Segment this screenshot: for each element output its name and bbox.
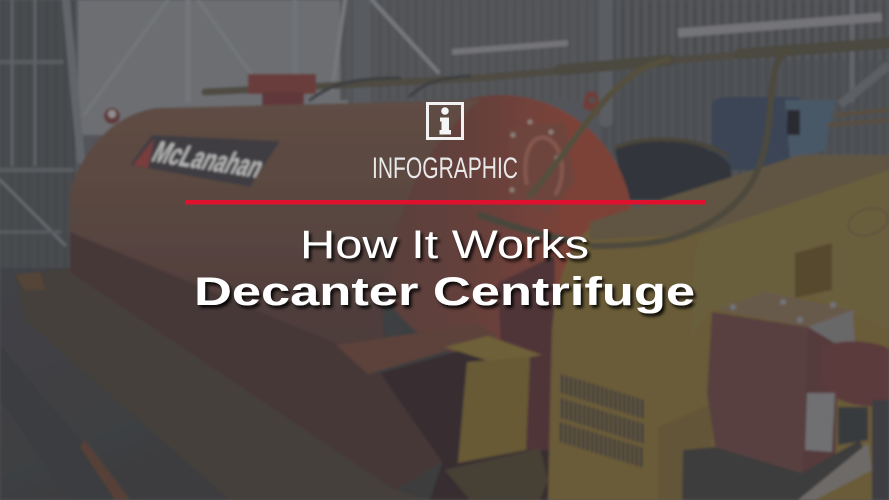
floor and rails [0, 268, 560, 500]
centrifuge drum body [70, 100, 480, 360]
red column behind pedestal [498, 255, 555, 450]
yellow pedestal [445, 336, 548, 500]
red flange on top of drum [104, 74, 316, 124]
McLanahan decal [130, 135, 280, 187]
mounting plate [336, 324, 497, 374]
steel frame struts [0, 0, 882, 245]
info icon [428, 104, 462, 138]
lower red casing [70, 232, 442, 490]
overhead pipes [205, 43, 889, 100]
gap behind pedestal [380, 345, 550, 500]
title line 2: Decanter Centrifuge [194, 270, 695, 314]
red divider line [185, 200, 706, 204]
title line 1: How It Works [300, 223, 589, 267]
McLanahan decal: McLanahan [147, 135, 270, 184]
yellow machine housing [548, 155, 889, 500]
label: INFOGRAPHIC: INFOGRAPHIC [372, 152, 518, 185]
vent slots [560, 374, 645, 468]
long yellow hose [590, 50, 790, 246]
blue motor at right [615, 65, 889, 200]
machine base plate [682, 400, 889, 500]
red gearbox block [707, 292, 889, 473]
red end disc [367, 95, 633, 361]
hose across disc [480, 60, 668, 246]
flange ring and bolts [507, 92, 600, 215]
